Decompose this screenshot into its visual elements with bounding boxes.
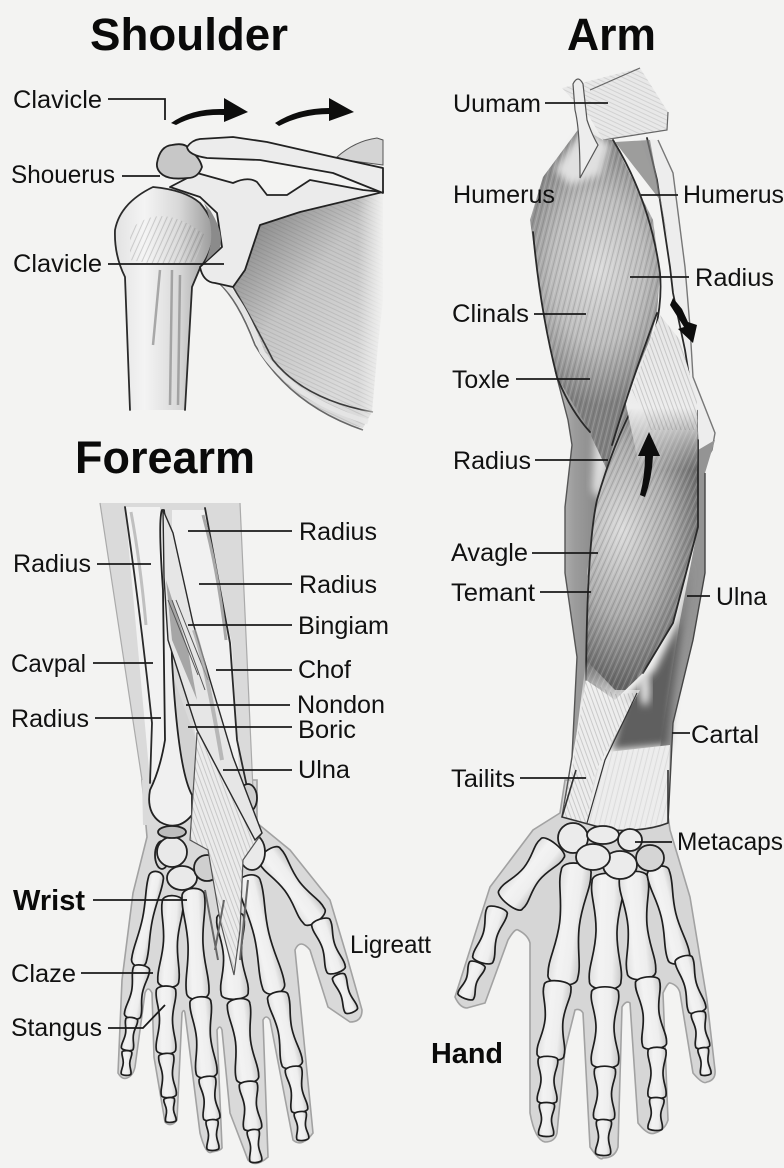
forearm sleeve bbox=[100, 503, 257, 825]
wrist sleeve bbox=[562, 693, 670, 831]
labels: forearm: Cavpal bbox=[11, 650, 86, 678]
ulna head bbox=[239, 784, 257, 812]
tendon bundle bbox=[190, 733, 262, 975]
labels: arm: Metacaps bbox=[677, 828, 783, 856]
wrist carpals: left hand bbox=[155, 826, 265, 890]
forearm left strip bbox=[555, 370, 620, 817]
labels: forearm: Ligreatt bbox=[350, 931, 431, 959]
heading: Shoulder: Shoulder bbox=[90, 9, 288, 60]
labels: forearm: Boric bbox=[298, 716, 356, 744]
labels: forearm: Radius bbox=[11, 705, 89, 733]
labels: arm: Temant bbox=[451, 579, 535, 607]
labels: forearm: Radius bbox=[299, 518, 377, 546]
hand outline bbox=[455, 780, 715, 1159]
labels: forearm: Chof bbox=[298, 656, 351, 684]
top tendon cap bbox=[562, 68, 668, 140]
panel: forearm bbox=[75, 432, 362, 1163]
labels: arm: Tailits bbox=[451, 765, 515, 793]
hand bones: right hand bbox=[457, 835, 711, 1156]
humerus bbox=[115, 187, 213, 410]
labels: forearm: Nondon bbox=[297, 691, 385, 719]
labels: forearm bbox=[11, 518, 431, 1042]
panel: shoulder bbox=[90, 9, 385, 435]
labels: arm: Uumam bbox=[453, 90, 541, 118]
outer humerus strip bbox=[640, 138, 715, 470]
forearm dark recess bbox=[612, 560, 692, 750]
slender tendon bbox=[573, 79, 598, 178]
wrist carpals: right hand bbox=[558, 823, 664, 879]
scapula neck and coracoid bbox=[170, 173, 383, 287]
labels: arm: Radius bbox=[453, 447, 531, 475]
labels: shoulder: Clavicle bbox=[13, 250, 102, 278]
arm tendon bbox=[562, 660, 640, 823]
icon: arrow down bbox=[670, 298, 697, 343]
labels: arm: Avagle bbox=[451, 539, 528, 567]
hand bones: left hand bbox=[121, 843, 359, 1163]
labels: arm: Toxle bbox=[452, 366, 510, 394]
forearm right strip bbox=[655, 440, 715, 823]
labels: forearm: Ulna bbox=[298, 756, 350, 784]
labels: forearm: Radius bbox=[299, 571, 377, 599]
upper arm muscle bbox=[530, 125, 668, 470]
labels: forearm: Claze bbox=[11, 960, 76, 988]
labels: arm: Humerus bbox=[683, 181, 784, 209]
scapula blade bbox=[218, 138, 385, 435]
heading: Forearm: Forearm bbox=[75, 432, 255, 483]
clavicle bbox=[187, 137, 383, 193]
labels: shoulder bbox=[11, 86, 115, 278]
labels: arm: Ulna bbox=[716, 583, 767, 611]
panel: arm bbox=[455, 9, 715, 1159]
heading: Arm: Arm bbox=[567, 9, 656, 60]
labels: forearm: Radius bbox=[13, 550, 91, 578]
icon: arrow up bbox=[638, 432, 660, 497]
labels: forearm: Stangus bbox=[11, 1014, 102, 1042]
labels: shoulder: Shouerus bbox=[11, 161, 115, 189]
radius bone bbox=[149, 510, 192, 826]
labels: arm bbox=[431, 90, 784, 1070]
leader lines bbox=[81, 99, 710, 1028]
labels: forearm: Wrist bbox=[13, 885, 85, 917]
glenoid shading bbox=[204, 203, 221, 262]
labels: arm: Cartal bbox=[691, 721, 759, 749]
labels: arm: Hand bbox=[431, 1038, 503, 1070]
labels: shoulder: Clavicle bbox=[13, 86, 102, 114]
acromion knob bbox=[157, 144, 202, 179]
hand outline bbox=[118, 780, 362, 1163]
labels: arm: Clinals bbox=[452, 300, 529, 328]
icon: motion arrows bbox=[171, 98, 354, 126]
labels: arm: Humerus bbox=[453, 181, 555, 209]
forearm main belly bbox=[586, 313, 698, 706]
diagonal tendon bbox=[163, 510, 262, 840]
labels: arm: Radius bbox=[695, 264, 774, 292]
labels: forearm: Bingiam bbox=[298, 612, 389, 640]
